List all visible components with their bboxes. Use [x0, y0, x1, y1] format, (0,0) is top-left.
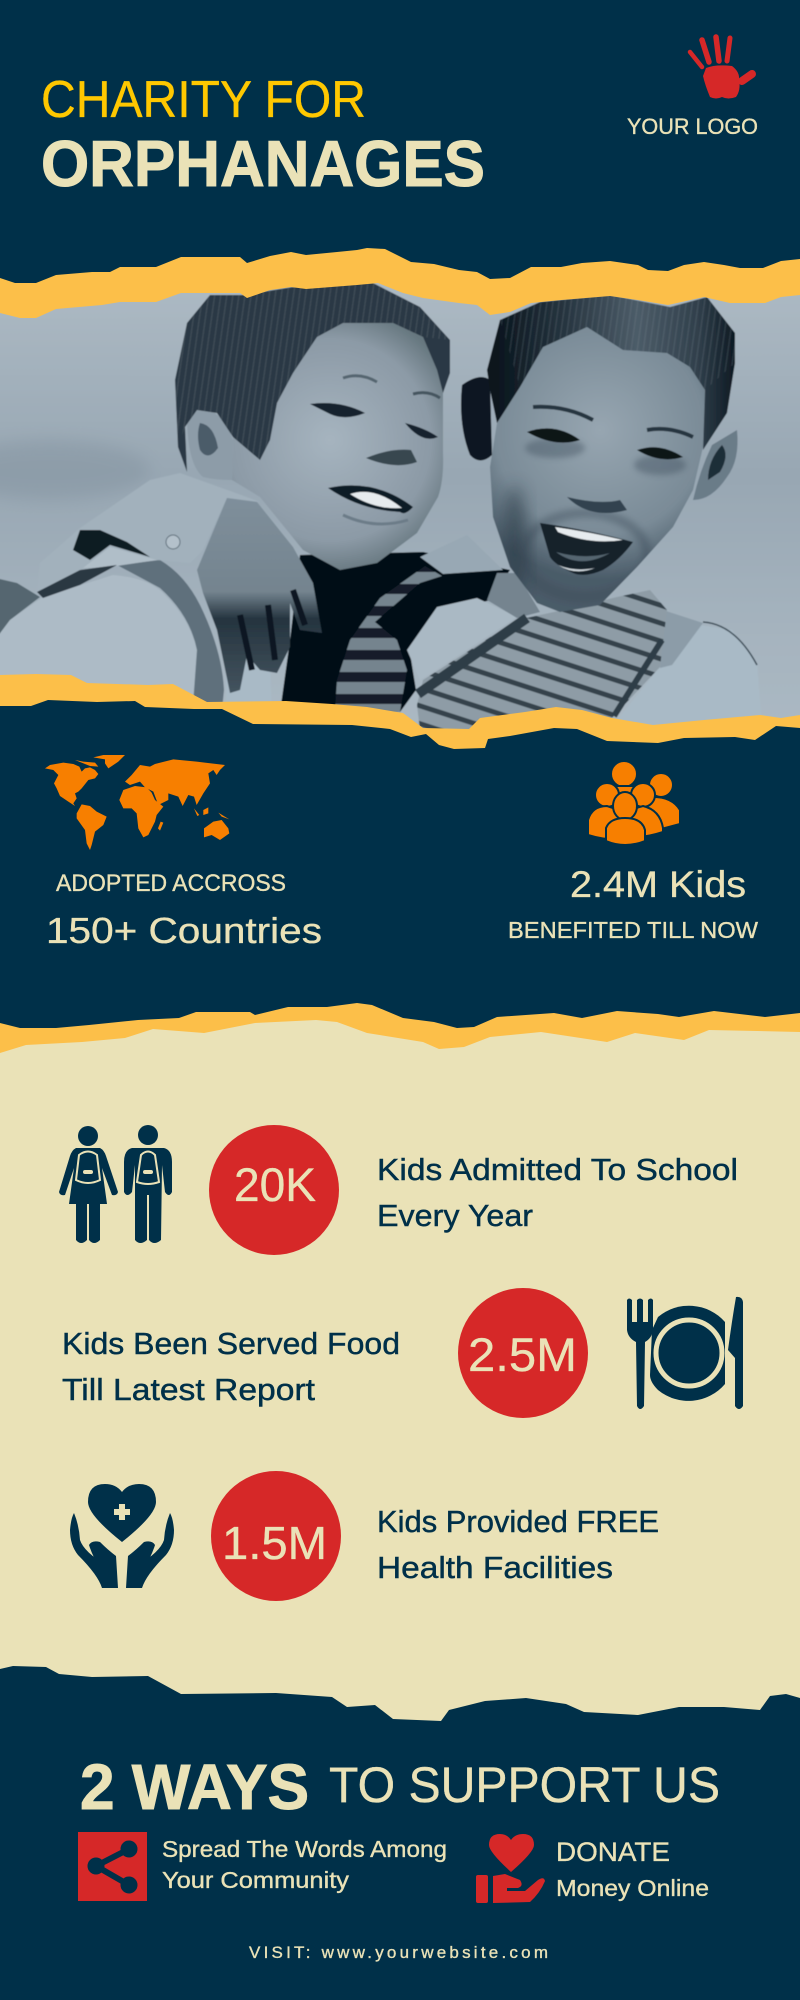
torn yellow strip above cream panel	[0, 1003, 800, 1070]
logo: red hand with label	[627, 37, 758, 139]
icon: share in red square	[78, 1832, 147, 1901]
arm around shoulder	[37, 473, 322, 693]
nose shadow	[366, 450, 417, 465]
text: kids been served food: Kids Been Served Food	[62, 1326, 400, 1361]
dark neck region	[280, 552, 510, 712]
text: kids admitted to school: Kids Admitted To School	[377, 1152, 738, 1187]
heading: 2 ways to support us: TO SUPPORT US	[329, 1757, 720, 1813]
text: 150+ countries: 150+ Countries	[46, 910, 322, 951]
text: kids been served food	[62, 1326, 400, 1407]
text: donate	[556, 1837, 709, 1901]
eyes and brows	[527, 428, 580, 443]
text: kids provided free	[377, 1504, 659, 1585]
icon: world map	[45, 755, 229, 850]
ear	[187, 408, 233, 480]
shoulder strap	[117, 560, 224, 710]
face	[490, 320, 705, 612]
right boy head	[461, 295, 738, 612]
heading: 2 ways to support us	[80, 1751, 720, 1823]
ears	[461, 377, 492, 460]
text: kids provided free: Kids Provided FREE	[377, 1504, 659, 1539]
badge: 2.5M	[458, 1288, 588, 1418]
text: spread the words: Spread The Words Among	[162, 1836, 447, 1862]
panel: navy statistics band	[0, 700, 800, 1040]
text: spread the words	[162, 1836, 447, 1893]
left bag	[0, 578, 40, 634]
left boy head	[175, 283, 450, 570]
text: 2.4M kids: 2.4M Kids	[570, 864, 746, 905]
icon: school children with backpacks	[59, 1125, 172, 1243]
badge: 1.5M: 1.5M	[222, 1517, 327, 1569]
text: kids admitted to school	[377, 1152, 738, 1233]
icon: hand with heart	[476, 1834, 545, 1903]
hand and fingers	[197, 498, 322, 693]
hair	[175, 283, 450, 472]
photo background	[0, 270, 800, 760]
text: adopted across: ADOPTED ACCROSS	[56, 870, 286, 897]
right boy collar and chest	[406, 552, 540, 660]
heading: 2 ways to support us: 2 WAYS	[80, 1751, 309, 1823]
text: kids provided free: Health Facilities	[377, 1550, 613, 1585]
nose	[567, 497, 627, 513]
hair	[487, 295, 735, 450]
text: spread the words: Your Community	[162, 1867, 350, 1893]
text: kids admitted to school: Every Year	[377, 1198, 533, 1233]
text: donate: Money Online	[556, 1875, 709, 1901]
text: benefited till now: BENEFITED TILL NOW	[508, 917, 758, 943]
icon: hands holding heart	[70, 1484, 174, 1588]
badge: 20K: 20K	[234, 1158, 316, 1211]
sleeve	[114, 474, 244, 560]
icon: group of people	[588, 761, 680, 845]
smile	[328, 485, 413, 513]
logo label: YOUR LOGO	[627, 114, 758, 139]
panel: cream statistics	[0, 1020, 800, 1760]
scarf knit	[335, 566, 667, 735]
open mouth	[540, 523, 633, 575]
face	[232, 323, 443, 570]
title: CHARITY FOR	[41, 71, 366, 129]
badge: 1.5M	[211, 1471, 341, 1601]
icon: red hand print	[690, 37, 752, 98]
panel: navy support footer	[0, 1666, 800, 2000]
eyes and brows	[310, 403, 365, 417]
left boy shirt	[0, 576, 185, 635]
right boy shirt and strap	[660, 612, 758, 668]
photo: two laughing boys (duotone)	[0, 270, 800, 760]
badge: 2.5M: 2.5M	[468, 1328, 577, 1381]
shirt behind hand	[226, 640, 272, 710]
text: kids been served food: Till Latest Report	[62, 1372, 315, 1407]
text: donate: DONATE	[556, 1837, 670, 1867]
title	[41, 71, 485, 200]
badge: 20K	[209, 1125, 339, 1255]
torn yellow strip below photo	[0, 674, 800, 800]
text: website: VISIT: www.yourwebsite.com	[249, 1943, 548, 1962]
icon: plate with fork and knife	[627, 1297, 743, 1409]
torn yellow strip above photo	[0, 248, 800, 400]
title: ORPHANAGES	[41, 127, 485, 200]
